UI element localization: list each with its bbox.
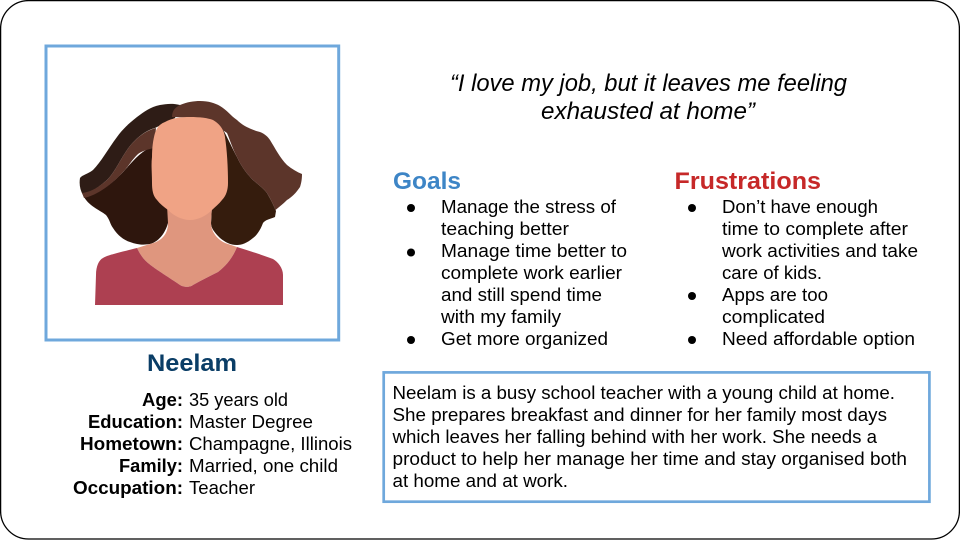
face xyxy=(152,117,228,220)
panel: portrait photo frame xyxy=(46,46,339,340)
frustrations list: complicated xyxy=(722,307,825,327)
goals list: teaching better xyxy=(441,219,569,239)
quote: “I love my job, but it leaves me feeling xyxy=(450,70,848,97)
left hair lower xyxy=(83,140,170,245)
occupation xyxy=(73,478,255,498)
frustrations list: Apps are too xyxy=(722,285,828,305)
education: Master Degree xyxy=(189,412,313,432)
goals list: with my family xyxy=(440,307,561,327)
right hair lower xyxy=(211,128,276,245)
family: Family: xyxy=(119,456,183,476)
panel: goals xyxy=(393,168,627,349)
goals list: Get more organized xyxy=(441,329,608,349)
occupation: Teacher xyxy=(189,478,255,498)
goals list: Manage time better to xyxy=(441,241,627,261)
hometown xyxy=(80,434,352,454)
frustrations list: care of kids. xyxy=(722,263,822,283)
right hair upper xyxy=(172,101,302,210)
hometown: Champagne, Illinois xyxy=(189,434,352,454)
hometown: Hometown: xyxy=(80,434,183,454)
left hair upper xyxy=(80,104,180,195)
neck and chest xyxy=(137,205,237,287)
family: Married, one child xyxy=(189,456,338,476)
goals list: and still spend time xyxy=(441,285,602,305)
family xyxy=(119,456,338,476)
persona name: Neelam xyxy=(147,350,237,377)
frustrations list xyxy=(688,197,918,349)
age xyxy=(142,390,288,410)
education: Education: xyxy=(88,412,183,432)
bio text: product to help her manage her time and stay organised both xyxy=(392,449,907,469)
age: 35 years old xyxy=(189,390,288,410)
icon: woman avatar xyxy=(80,101,302,305)
goals list: Manage the stress of xyxy=(441,197,617,217)
shirt xyxy=(95,247,283,305)
age: Age: xyxy=(142,390,183,410)
frustrations list: Need affordable option xyxy=(722,329,915,349)
frustrations list: time to complete after xyxy=(722,219,908,239)
education xyxy=(88,412,313,432)
bio text: at home and at work. xyxy=(392,471,568,491)
frustrations list: work activities and take xyxy=(721,241,918,261)
panel: bio summary xyxy=(384,372,929,502)
bio text xyxy=(391,383,907,491)
goals list: complete work earlier xyxy=(441,263,622,283)
occupation: Occupation: xyxy=(73,478,183,498)
frustrations heading: Frustrations xyxy=(674,168,821,195)
quote: exhausted at home” xyxy=(541,98,756,125)
bio text: She prepares breakfast and dinner for her family most days xyxy=(392,405,887,425)
panel: frustrations xyxy=(674,168,918,349)
bio text: which leaves her falling behind with her work. She needs a xyxy=(391,427,878,447)
goals list xyxy=(407,197,627,349)
quote xyxy=(450,70,848,125)
demographics list xyxy=(73,390,352,498)
left hair highlight band xyxy=(82,128,156,198)
goals heading: Goals xyxy=(393,168,461,195)
bio text: Neelam is a busy school teacher with a young child at home. xyxy=(392,383,895,403)
frustrations list: Don’t have enough xyxy=(722,197,878,217)
